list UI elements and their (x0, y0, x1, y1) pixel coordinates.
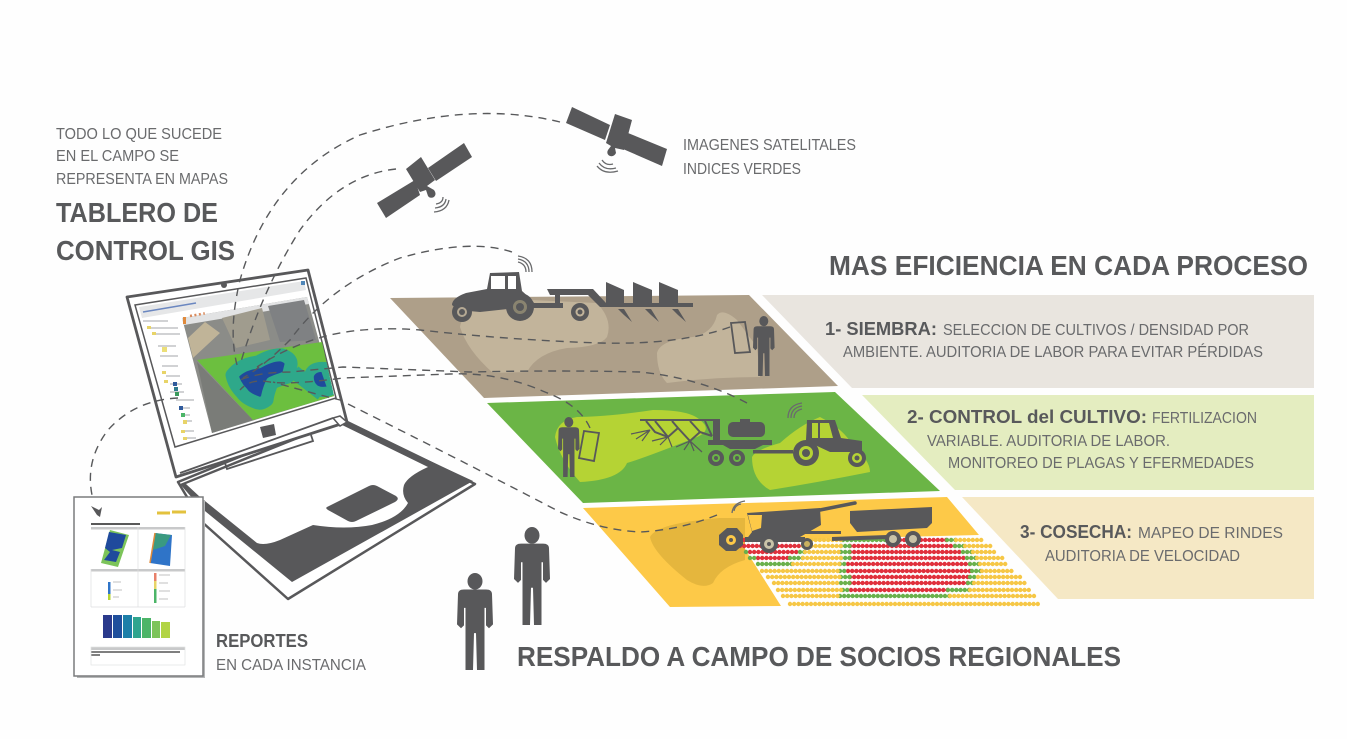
text: siembra: SELECCION DE CULTIVOS / DENSIDAD POR (943, 322, 1249, 339)
text: reportes (216, 631, 366, 674)
laptop camera (221, 282, 227, 288)
intro text: todo lo que sucede (56, 126, 228, 188)
heading: tablero de control GIS: CONTROL GIS (56, 235, 235, 266)
report logo (157, 512, 186, 513)
text: cosecha: 3- COSECHA: (1020, 522, 1132, 542)
icon: person regional left (457, 573, 493, 670)
laptop trackpad (326, 485, 398, 522)
text: control del cultivo: MONITOREO DE PLAGAS Y EFERMEDADES (948, 455, 1254, 472)
report title and headers (91, 523, 140, 525)
text: cosecha (1020, 522, 1283, 565)
text: siembra (825, 319, 1263, 361)
laptop lid (127, 270, 347, 477)
text: imagenes satelitales (683, 137, 856, 178)
report sheet (74, 497, 205, 678)
text: reportes: REPORTES (216, 631, 308, 651)
field: siembra (390, 295, 838, 398)
heading: respaldo a campo: RESPALDO A CAMPO DE SOCIOS REGIONALES (517, 641, 1121, 672)
intro text: todo lo que sucede: EN EL CAMPO SE (56, 148, 179, 165)
icon: satellite left (377, 143, 472, 218)
arrow into report (91, 506, 102, 517)
text: imagenes satelitales: INDICES VERDES (683, 161, 801, 178)
panel: band siembra (762, 295, 1314, 388)
icon: satellite right (566, 107, 667, 172)
heading: mas eficiencia: MAS EFICIENCIA EN CADA PROCESO (829, 250, 1308, 281)
report bar chart (103, 615, 170, 638)
text: reportes: EN CADA INSTANCIA (216, 657, 366, 674)
text: control del cultivo: 2- CONTROL del CULTIVO: (907, 407, 1147, 427)
field: cosecha (583, 497, 979, 607)
laptop logo square (260, 424, 276, 438)
icon: sprayer and tractor (631, 403, 866, 467)
icon: person field 1 (753, 316, 775, 376)
yield map dots (740, 540, 1038, 604)
text: cosecha: MAPEO DE RINDES (1138, 525, 1283, 542)
text: cosecha: AUDITORIA DE VELOCIDAD (1045, 548, 1240, 565)
panel: band cosecha (962, 497, 1314, 599)
text: imagenes satelitales: IMAGENES SATELITALES (683, 137, 856, 154)
text: control del cultivo: VARIABLE. AUDITORIA DE LABOR. (927, 433, 1170, 450)
icon: laptop (127, 270, 475, 599)
laptop keyboard deck dark area (180, 419, 473, 582)
laptop screen (135, 278, 336, 447)
icon: phone field 1 (731, 322, 750, 353)
report map left (101, 530, 129, 567)
icon: combine harvester with trailer (719, 501, 932, 553)
intro text: todo lo que sucede: TODO LO QUE SUCEDE (56, 126, 222, 143)
text: control del cultivo: FERTILIZACION (1152, 410, 1257, 427)
report map right (150, 533, 172, 566)
intro text: todo lo que sucede: REPRESENTA EN MAPAS (56, 171, 228, 188)
report footer (91, 647, 185, 665)
dashed connection lines (90, 114, 747, 532)
laptop base (178, 417, 475, 599)
field: control del cultivo (487, 392, 940, 503)
icon: person regional right (514, 527, 550, 625)
panel: band control del cultivo (862, 395, 1314, 490)
heading: tablero de control GIS: TABLERO DE (56, 197, 218, 228)
laptop palm rest (186, 423, 428, 544)
text: control del cultivo (907, 407, 1257, 472)
text: siembra: AMBIENTE. AUDITORIA DE LABOR PARA EVITAR PÉRDIDAS (843, 342, 1263, 361)
icon: phone field 2 (579, 431, 599, 461)
heading: tablero de control GIS (56, 197, 235, 266)
icon: tractor with seeder (452, 256, 693, 322)
report legends (108, 573, 170, 603)
text: siembra: 1- SIEMBRA: (825, 319, 937, 339)
icon: person field 2 (558, 417, 580, 477)
